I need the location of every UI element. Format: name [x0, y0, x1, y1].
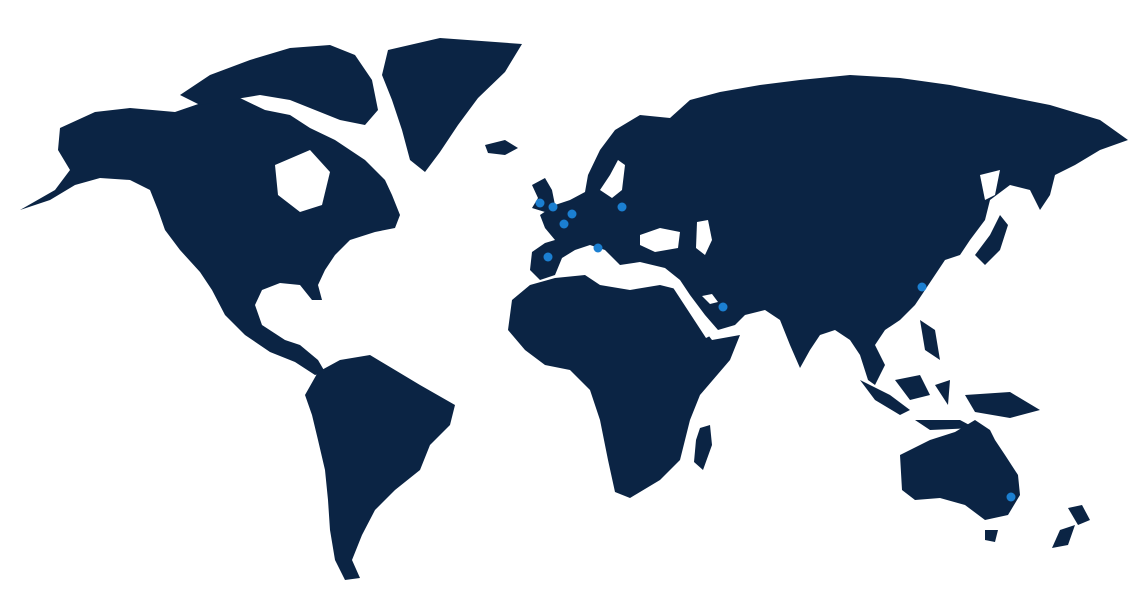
landmass: north america: [20, 98, 400, 375]
australia: [900, 420, 1020, 520]
british isles: [532, 178, 555, 212]
inland water: [275, 150, 1000, 338]
arctic islands: [180, 45, 378, 125]
location dots: [536, 198, 1016, 502]
southeast asia islands: [860, 380, 910, 415]
madagascar: [694, 425, 712, 470]
iceland: [485, 140, 518, 155]
south america: [305, 355, 455, 580]
greenland: [382, 38, 522, 172]
eurasia: [530, 75, 1128, 385]
africa: [508, 275, 740, 498]
new zealand: [1068, 505, 1090, 525]
japan: [975, 215, 1008, 265]
